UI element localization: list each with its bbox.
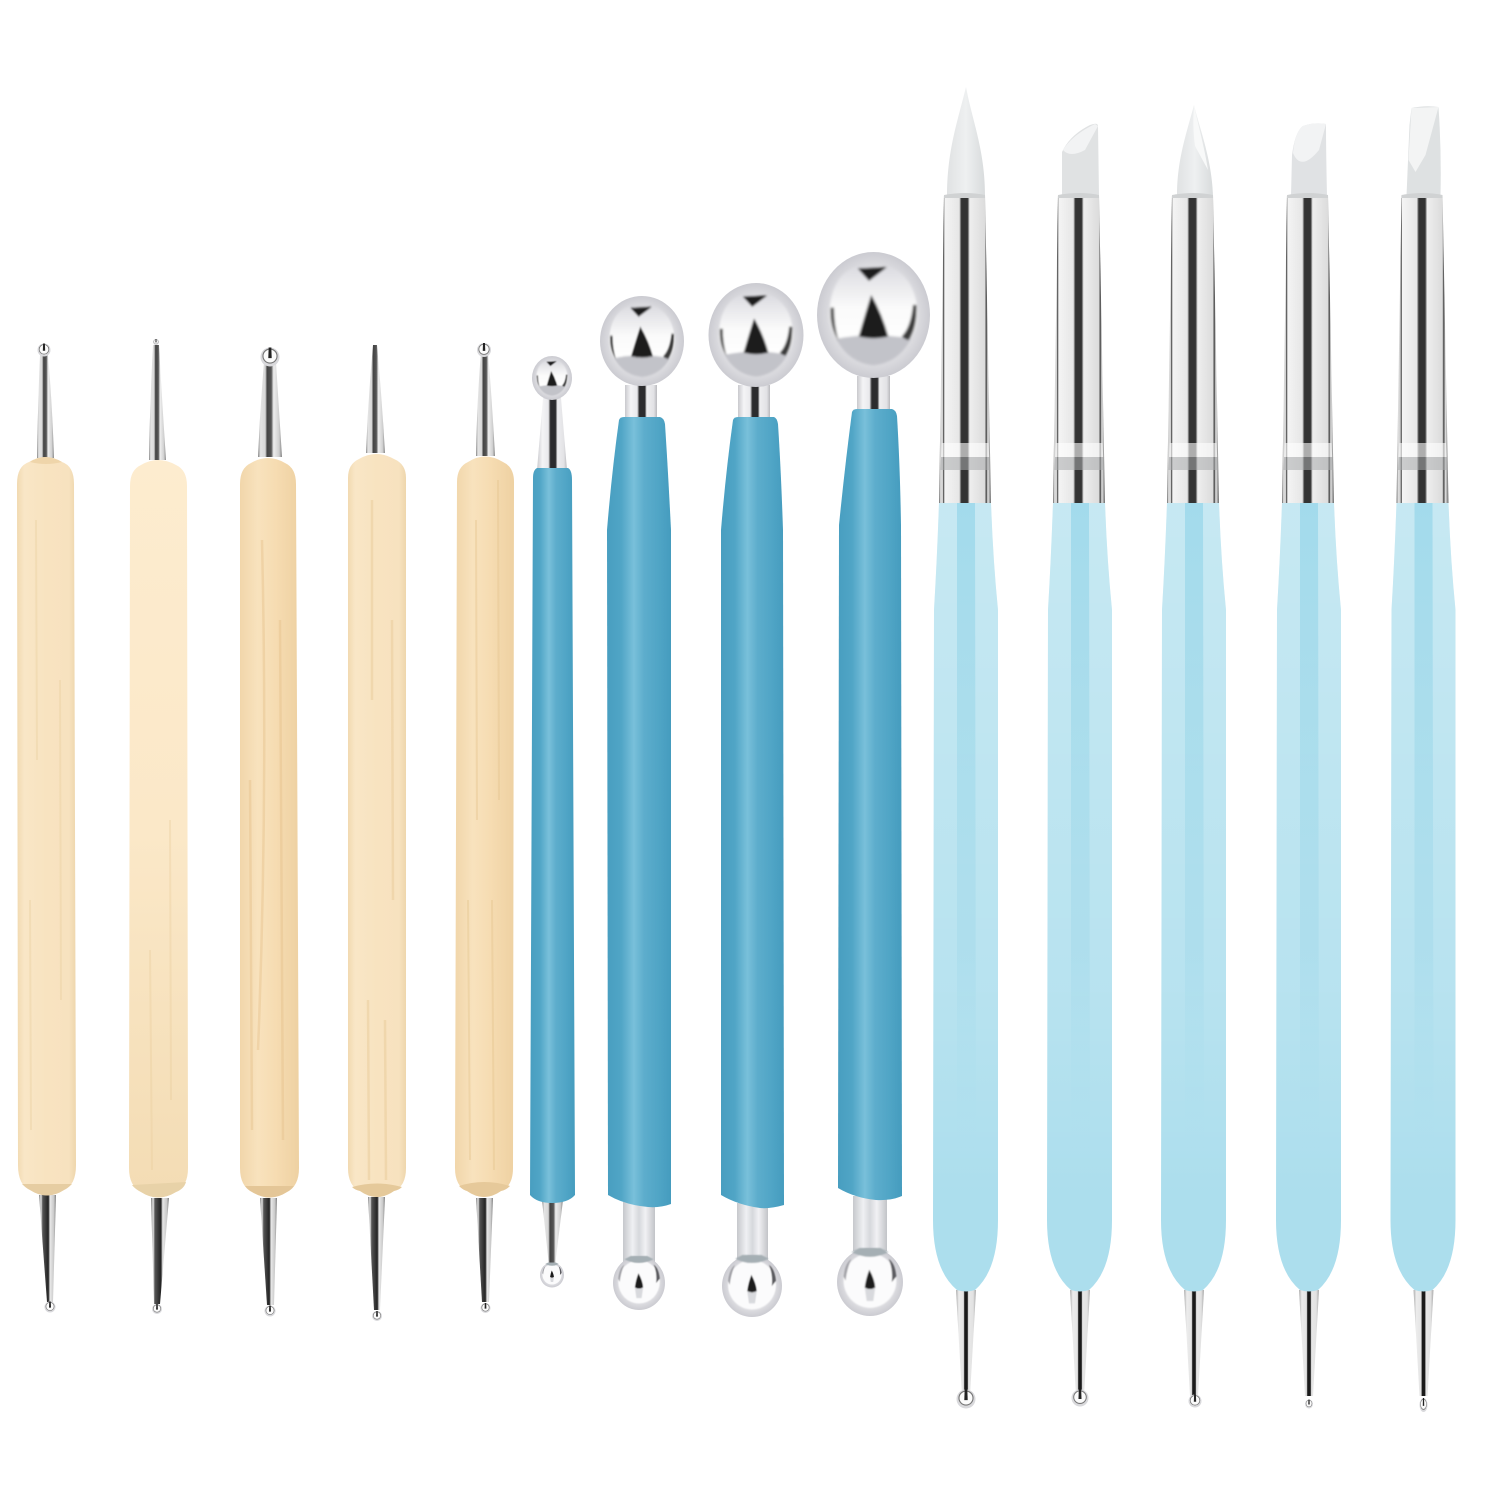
- silicone tool 5: flat chisel tip: [1390, 106, 1456, 1412]
- blue ball tool 2: [600, 296, 684, 1310]
- tool group: blue ball tools: [530, 252, 930, 1317]
- silicone tool 2: angled chisel tip: [1047, 124, 1112, 1407]
- wooden tool 2: [129, 339, 188, 1314]
- silicone tool 3: faceted pointed tip: [1161, 105, 1226, 1408]
- blue ball tool 3: [708, 283, 804, 1317]
- tool group: wooden dotting tools: [17, 339, 514, 1321]
- silicone tool 1: pointed tip: [933, 87, 998, 1408]
- tool group: light blue silicone tools: [933, 87, 1456, 1412]
- silicone tool 4: rounded chisel tip: [1276, 123, 1341, 1408]
- wooden tool 5: [455, 343, 514, 1313]
- blue ball tool 1: [530, 356, 575, 1288]
- wooden tool 1: [17, 344, 76, 1312]
- wooden tool 4: [348, 345, 406, 1321]
- blue ball tool 4: [817, 252, 930, 1316]
- wooden tool 3: [240, 348, 299, 1316]
